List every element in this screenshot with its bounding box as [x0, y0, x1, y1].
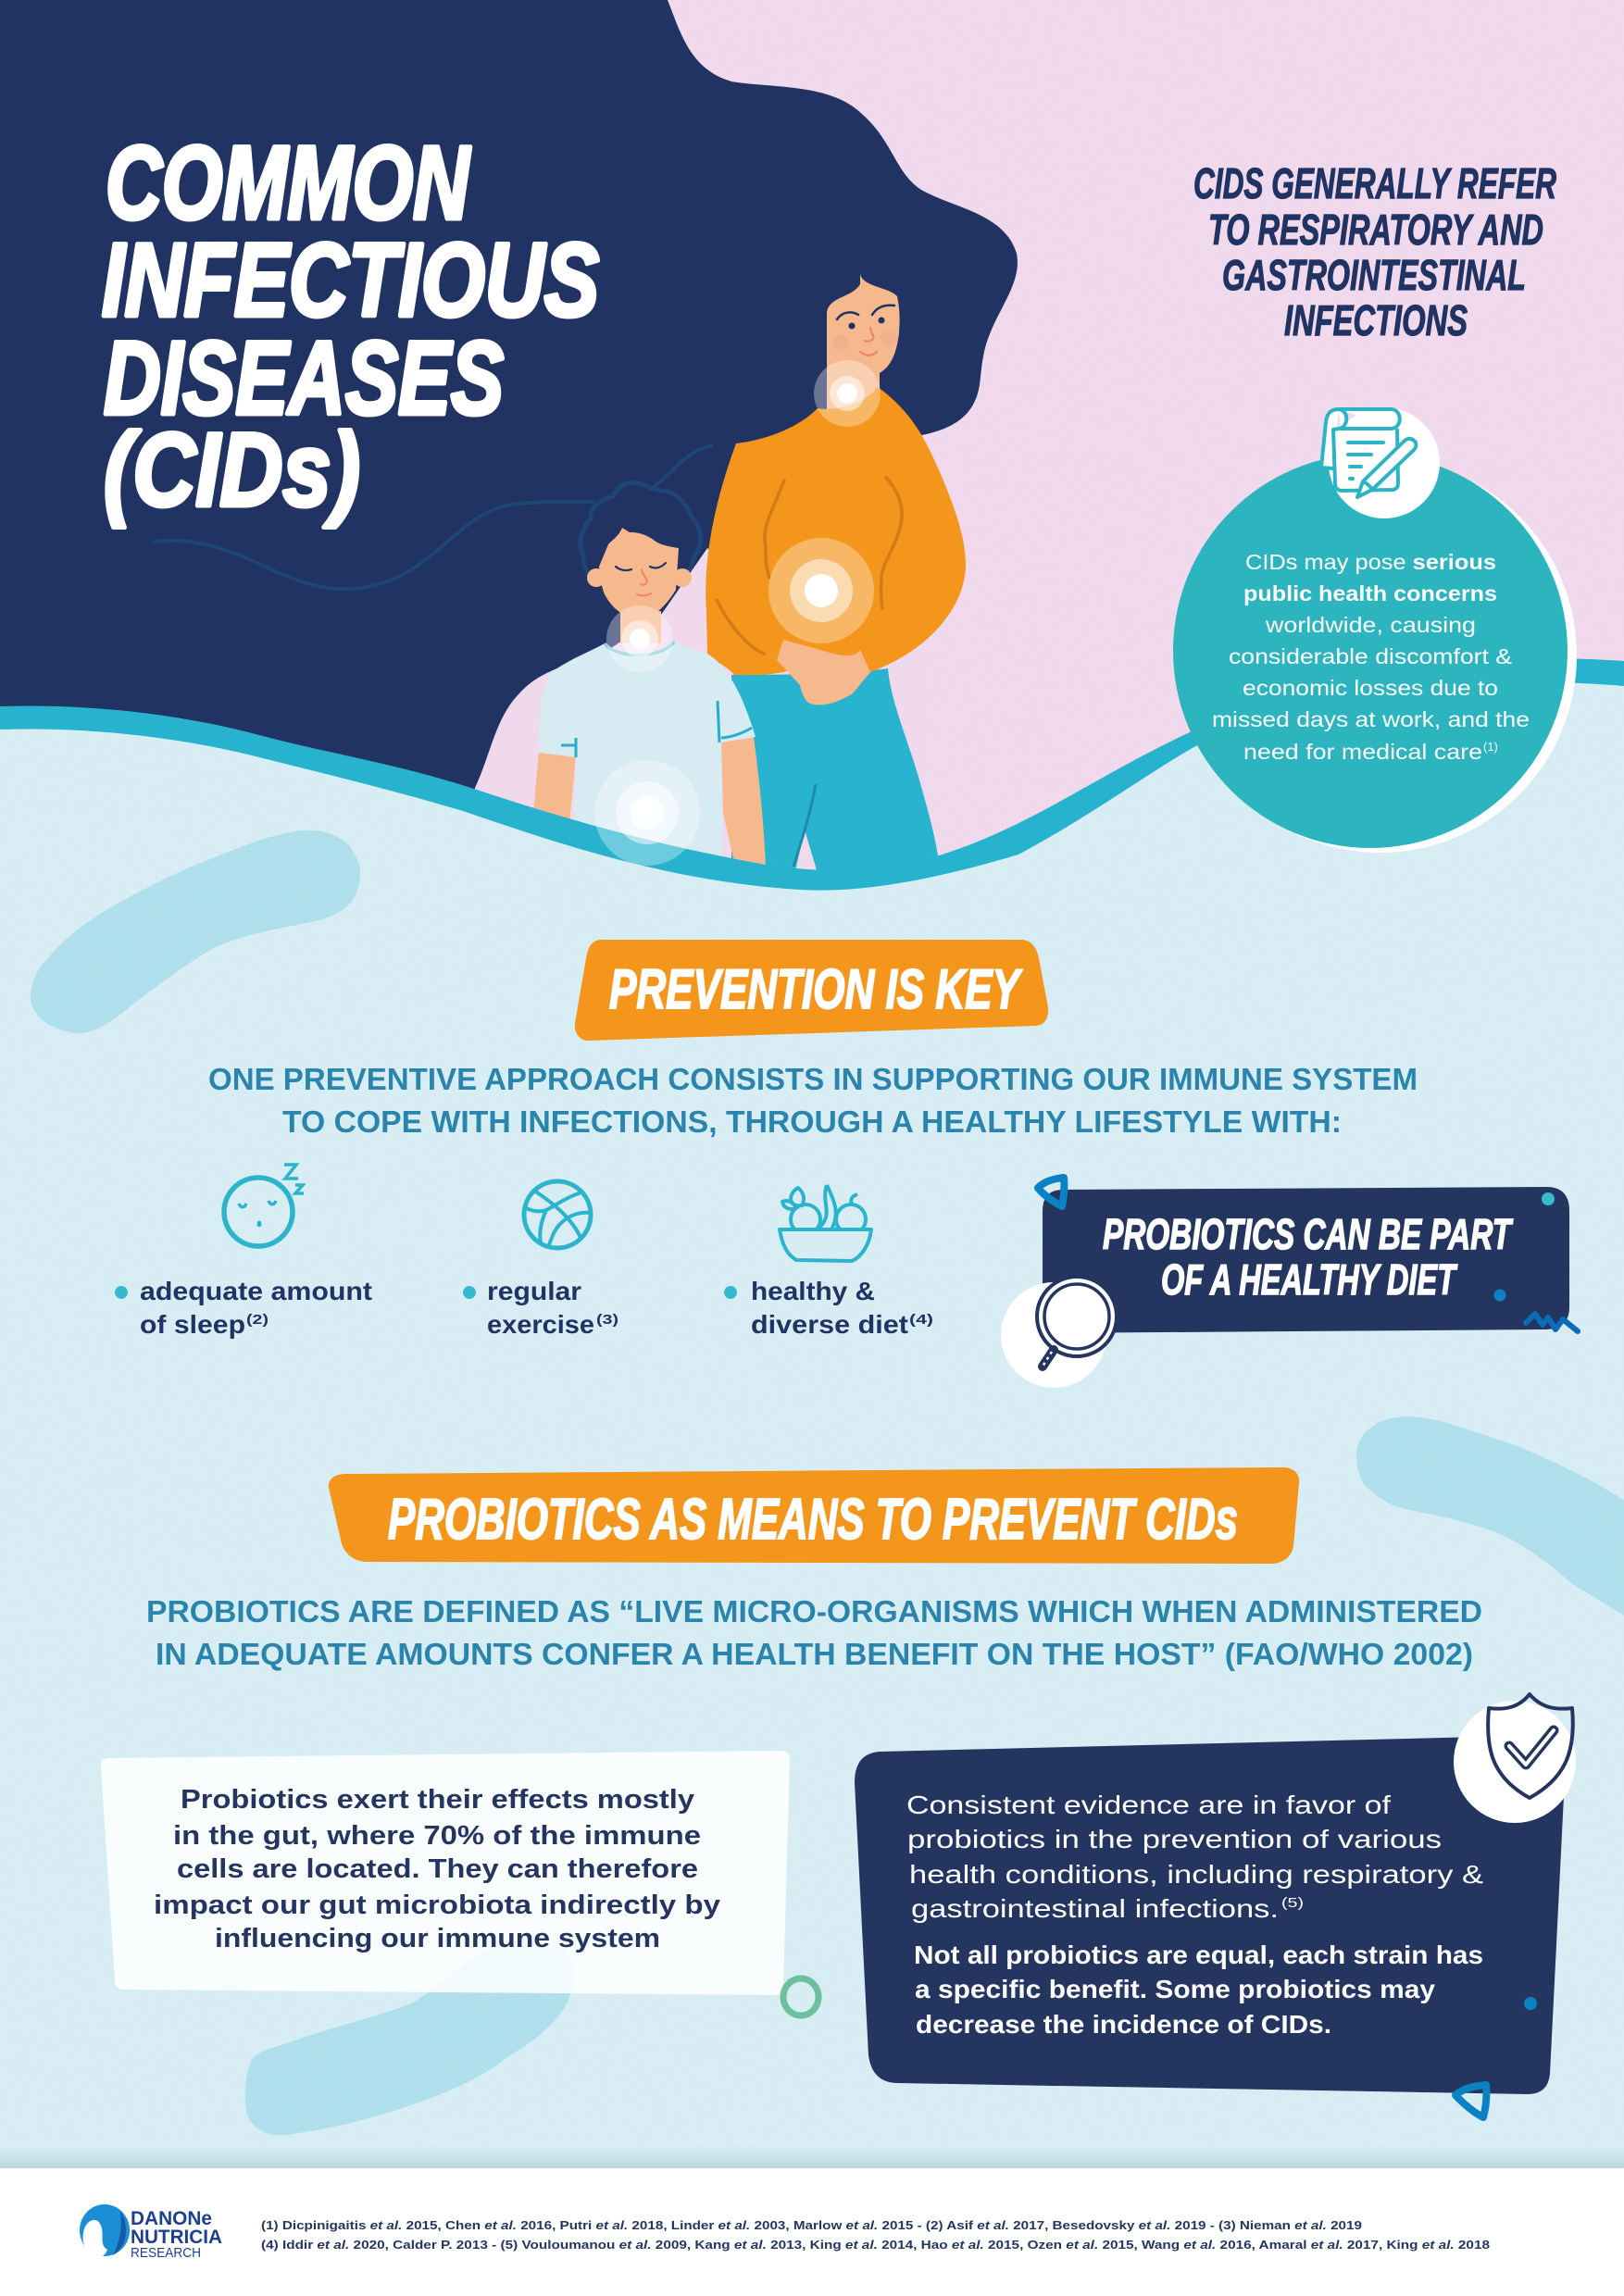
- deco: zigzag: [1526, 1314, 1578, 1331]
- title: (CIDs): [104, 412, 360, 528]
- light blue background: [0, 683, 1624, 2167]
- shirt: [539, 642, 756, 856]
- panel text: [154, 1785, 720, 1953]
- nose and mouth: [860, 328, 877, 356]
- hair strand line: [154, 445, 711, 589]
- evidence text: probiotics in the prevention of various: [907, 1825, 1442, 1853]
- callout: probiotics in a healthy diet: [1001, 1178, 1578, 1388]
- wave band: [0, 658, 1624, 2296]
- logo: Danone Nutricia Research: NUTRICIA: [131, 2227, 222, 2248]
- subtitle: CIDs definition: INFECTIONS: [1284, 296, 1468, 344]
- heading: preventive approach: TO COPE WITH INFECTIONS, THROUGH A HEALTHY LIFESTYLE WITH:: [282, 1104, 1342, 1139]
- figure: boy: [533, 482, 766, 867]
- deco: triangle: [1038, 1178, 1064, 1206]
- circle text: considerable discomfort &: [1229, 644, 1512, 668]
- figure: woman: [706, 274, 966, 880]
- hair: [581, 482, 701, 579]
- list: healthy lifestyle items: adequate amount: [140, 1277, 372, 1305]
- title: DISEASES: [104, 320, 504, 436]
- panel text: impact our gut microbiota indirectly by: [154, 1890, 720, 1920]
- list: healthy lifestyle items: (3): [596, 1312, 618, 1328]
- references: (1) Dicpinigaitis et al. 2015, Chen et al. 2016, Putri et al. 2018, Linder et al. 2003, Marlow et al. 2015 - (2) Asif et al. 2017, Besedovsky et al. 2019 - (3) Nieman et al. 2019: [261, 2218, 1362, 2232]
- heading: preventive approach: [208, 1062, 1418, 1139]
- panel text: in the gut, where 70% of the immune: [173, 1821, 701, 1851]
- circle text: CIDs may pose serious: [1245, 550, 1496, 574]
- footer: [0, 2146, 1624, 2296]
- circle text: missed days at work, and the: [1212, 707, 1530, 731]
- symptom halos: [594, 360, 881, 866]
- banner: prevention is key: PREVENTION IS KEY: [609, 958, 1023, 1020]
- sweater: [706, 387, 966, 675]
- evidence text: Consistent evidence are in favor of: [906, 1791, 1391, 1819]
- arms: [533, 737, 766, 867]
- icon: shield with check: [1454, 1694, 1576, 1823]
- panel text: influencing our immune system: [215, 1924, 660, 1953]
- heading: probiotics definition: IN ADEQUATE AMOUNTS CONFER A HEALTH BENEFIT ON THE HOST” (FAO/WHO 2002): [156, 1637, 1473, 1671]
- nose and mouth: [637, 569, 651, 595]
- pink background: [0, 0, 1624, 926]
- eyes and brows: [837, 306, 894, 330]
- panel: evidence box: [855, 1694, 1576, 2117]
- navy hair shape: [0, 0, 1018, 833]
- face and ears: [587, 528, 692, 618]
- circle text: worldwide, causing: [1265, 613, 1476, 637]
- bacteria blobs: [30, 830, 1624, 2135]
- callout text: OF A HEALTHY DIET: [1161, 1255, 1458, 1304]
- icon: notepad with pencil: [1321, 407, 1440, 518]
- evidence text: Not all probiotics are equal, each strain has: [914, 1940, 1483, 1969]
- pants: [731, 668, 939, 880]
- cheeks: [832, 331, 897, 351]
- list: healthy lifestyle items: (2): [246, 1312, 269, 1328]
- references: [261, 2218, 1490, 2252]
- references: (4) Iddir et al. 2020, Calder P. 2013 - (5) Vouloumanou et al. 2009, Kang et al. 2013, King et al. 2014, Hao et al. 2015, Ozen et al. 2015, Wang et al. 2016, Amaral et al. 2017, King et al. 2018: [261, 2238, 1490, 2252]
- panel: gut immune text box: [101, 1751, 790, 1995]
- hand: [777, 640, 870, 705]
- banner: prevention is key: [575, 940, 1048, 1041]
- deco: green ring: [783, 1978, 818, 2015]
- title: INFECTIOUS: [102, 222, 599, 338]
- bullet: exercise: [463, 1286, 476, 1299]
- title: COMMON: [106, 125, 471, 241]
- deco: dots: [1494, 1192, 1555, 1302]
- evidence text: [906, 1791, 1483, 2039]
- circle text: public health concerns: [1243, 581, 1497, 605]
- icon: basketball: [524, 1181, 591, 1248]
- evidence text: health conditions, including respiratory &: [909, 1860, 1483, 1889]
- logo: Danone Nutricia Research: [80, 2204, 222, 2261]
- sweater creases: [717, 478, 902, 654]
- panel text: cells are located. They can therefore: [177, 1854, 698, 1884]
- bullet: diet: [724, 1286, 737, 1299]
- evidence text: (5): [1281, 1895, 1304, 1911]
- evidence text: a specific benefit. Some probiotics may: [915, 1975, 1435, 2003]
- subtitle: CIDs definition: [1193, 159, 1556, 344]
- deco: triangle: [1455, 2085, 1486, 2117]
- list: healthy lifestyle items: regular: [487, 1277, 581, 1305]
- evidence text: decrease the incidence of CIDs.: [916, 2010, 1331, 2039]
- list: healthy lifestyle items: [115, 1277, 933, 1339]
- deco: dot: [1524, 1997, 1537, 2010]
- sleeping eyes: [616, 563, 666, 570]
- list: healthy lifestyle items: healthy &: [751, 1277, 875, 1305]
- heading: probiotics definition: PROBIOTICS ARE DEFINED AS “LIVE MICRO-ORGANISMS WHICH WHEN ADMINISTERED: [146, 1594, 1482, 1628]
- logo: Danone Nutricia Research: RESEARCH: [131, 2245, 201, 2261]
- circle text: need for medical care: [1243, 740, 1482, 764]
- collar and sleeve lines: [561, 701, 752, 757]
- pink patch between figures: [463, 548, 926, 852]
- list: healthy lifestyle items: exercise: [487, 1310, 594, 1339]
- heading: preventive approach: ONE PREVENTIVE APPROACH CONSISTS IN SUPPORTING OUR IMMUNE SYSTEM: [208, 1062, 1418, 1096]
- callout text: [1103, 1210, 1514, 1304]
- icon: magnifier: [1001, 1277, 1117, 1388]
- list: healthy lifestyle items: of sleep: [140, 1310, 245, 1339]
- teal circle panel: [1173, 407, 1577, 853]
- banner: probiotics as means to prevent CIDs: [329, 1467, 1299, 1564]
- icon: sleeping face: [224, 1165, 304, 1246]
- neck: [827, 352, 880, 412]
- logo: Danone Nutricia Research: DANONe: [131, 2208, 212, 2229]
- circle text: economic losses due to: [1243, 676, 1498, 700]
- banner: probiotics as means to prevent CIDs: PROBIOTICS AS MEANS TO PREVENT CIDs: [388, 1488, 1238, 1552]
- heading: probiotics definition: [146, 1594, 1482, 1671]
- circle text: [1212, 550, 1530, 764]
- face: [827, 274, 900, 375]
- evidence text: gastrointestinal infections.: [911, 1894, 1279, 1923]
- neck: [620, 611, 661, 643]
- circle text: (1): [1483, 740, 1498, 754]
- list: healthy lifestyle items: (4): [909, 1312, 933, 1328]
- bullet: sleep: [115, 1286, 128, 1299]
- title: [102, 125, 599, 528]
- list: healthy lifestyle items: diverse diet: [751, 1310, 908, 1339]
- panel text: Probiotics exert their effects mostly: [181, 1785, 694, 1815]
- icon: fruit bowl: [780, 1185, 871, 1261]
